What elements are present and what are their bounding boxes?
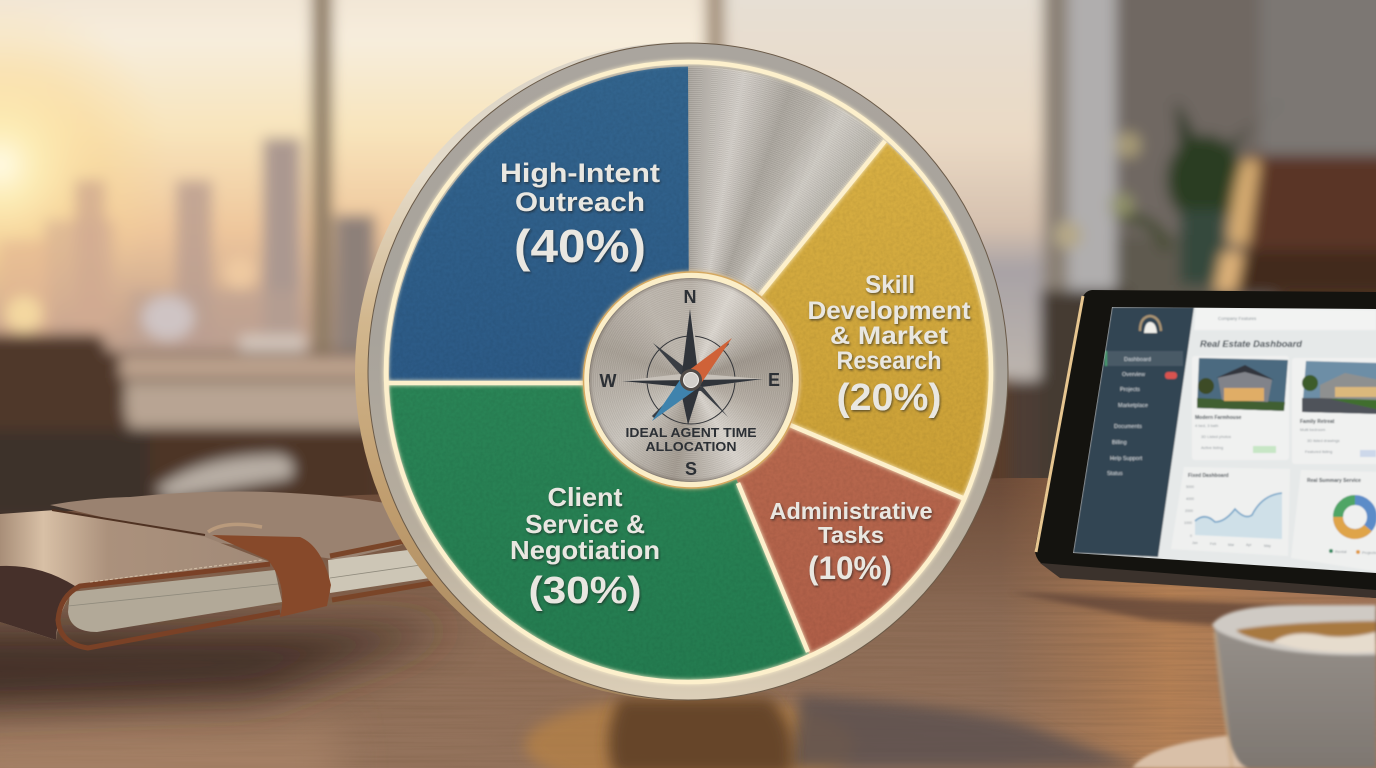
label: administrative tasks: Administrative [770,498,932,524]
compass letters: N [684,287,696,307]
property card 2: Multi bedroom [1300,427,1326,432]
tablet screen: Company Features [1218,316,1257,321]
segment: high-intent outreach [389,66,689,381]
dashboard heading: Real Estate Dashboard [1200,339,1303,349]
back cover [50,492,402,560]
brown chair [1240,155,1376,250]
label: skill development: Research [836,347,942,375]
label: skill development: Development [808,297,971,325]
disc rim [355,42,1008,700]
line chart card: 2000 [1185,509,1193,513]
segments [389,66,989,680]
line chart card: 5000 [1186,485,1194,489]
donut chart card: Rental [1335,549,1347,554]
segment: administrative tasks [736,428,962,654]
tablet screen: Status [1107,471,1123,477]
line chart card [1171,467,1290,556]
table surface [0,478,1376,768]
property card 1: Modern Farmhouse [1195,415,1242,421]
line chart card: 1000 [1184,521,1192,525]
line chart card: Mar [1228,543,1235,547]
center title: ALLOCATION [646,439,736,454]
compass letters: S [685,459,697,479]
label: skill development: & Market [830,322,949,350]
label: client service: Service & [525,509,645,539]
label: high-intent outreach: (40%) [514,220,646,272]
coffee cup and saucer [1132,605,1376,768]
pie dial: metal disc [355,40,1020,720]
property card 1: 3D Listed photos [1201,434,1231,439]
front cover [0,510,270,640]
line chart card: Feb [1210,542,1216,546]
label: client service: (30%) [528,570,642,612]
tablet screen: Projects [1120,387,1140,393]
tablet screen: Marketplace [1118,403,1148,409]
tablet screen: Help Support [1110,456,1143,462]
donut chart card: Real Summary Service [1307,478,1361,484]
pages [68,570,282,632]
leather piping [58,564,280,648]
tablet screen: Billing [1112,440,1127,446]
segment: skill development [760,142,989,496]
donut chart card [1291,470,1376,572]
label: skill development: Skill [865,271,915,299]
property card 2: Featured listing [1305,449,1332,454]
tablet logo [1140,316,1161,333]
line chart card: 4000 [1186,497,1194,501]
tablet screen [1060,300,1376,580]
tablet: real estate dashboard [1035,290,1376,598]
label: skill development: (20%) [836,377,942,419]
property card 2: 3D listed drawings [1307,438,1340,443]
label: administrative tasks: Tasks [818,522,884,548]
label: high-intent outreach: High-Intent [500,158,660,188]
compass letters: W [600,371,616,391]
label: client service: Client [548,482,623,512]
disc shadow and reflection [525,695,1145,768]
compass letters: E [768,370,780,390]
label: high-intent outreach: Outreach [515,187,645,217]
notebook: brown leather planner [0,492,438,648]
line chart card: Jan [1192,541,1198,545]
tablet screen: Documents [1114,424,1142,430]
property card 2: Family Retreat [1300,419,1335,425]
glowing dividers and ring [386,62,991,682]
compass hub [584,272,800,488]
label: client service: Negotiation [510,535,660,565]
line chart card: Fixed Dashboard [1188,473,1229,479]
plant [1175,100,1285,250]
tablet screen: Dashboard [1124,357,1151,363]
line chart card: 0 [1190,534,1192,538]
dark chair [0,334,150,500]
segment: client service [389,385,809,680]
property card 1: 4 bed, 3 bath [1195,423,1218,428]
line chart card: Apr [1246,543,1252,547]
segment: brushed steel empty wedge [688,66,883,294]
tablet screen: Overview [1122,372,1145,378]
sill and room [0,352,380,522]
property card 2 [1292,358,1376,464]
property card 1: Active listing [1201,445,1223,450]
strap and snap [208,524,262,532]
compass rose [622,309,763,425]
property card 1 [1192,356,1289,460]
label: administrative tasks: (10%) [808,550,892,586]
center title: IDEAL AGENT TIME [626,425,757,440]
line chart card: May [1264,544,1271,548]
